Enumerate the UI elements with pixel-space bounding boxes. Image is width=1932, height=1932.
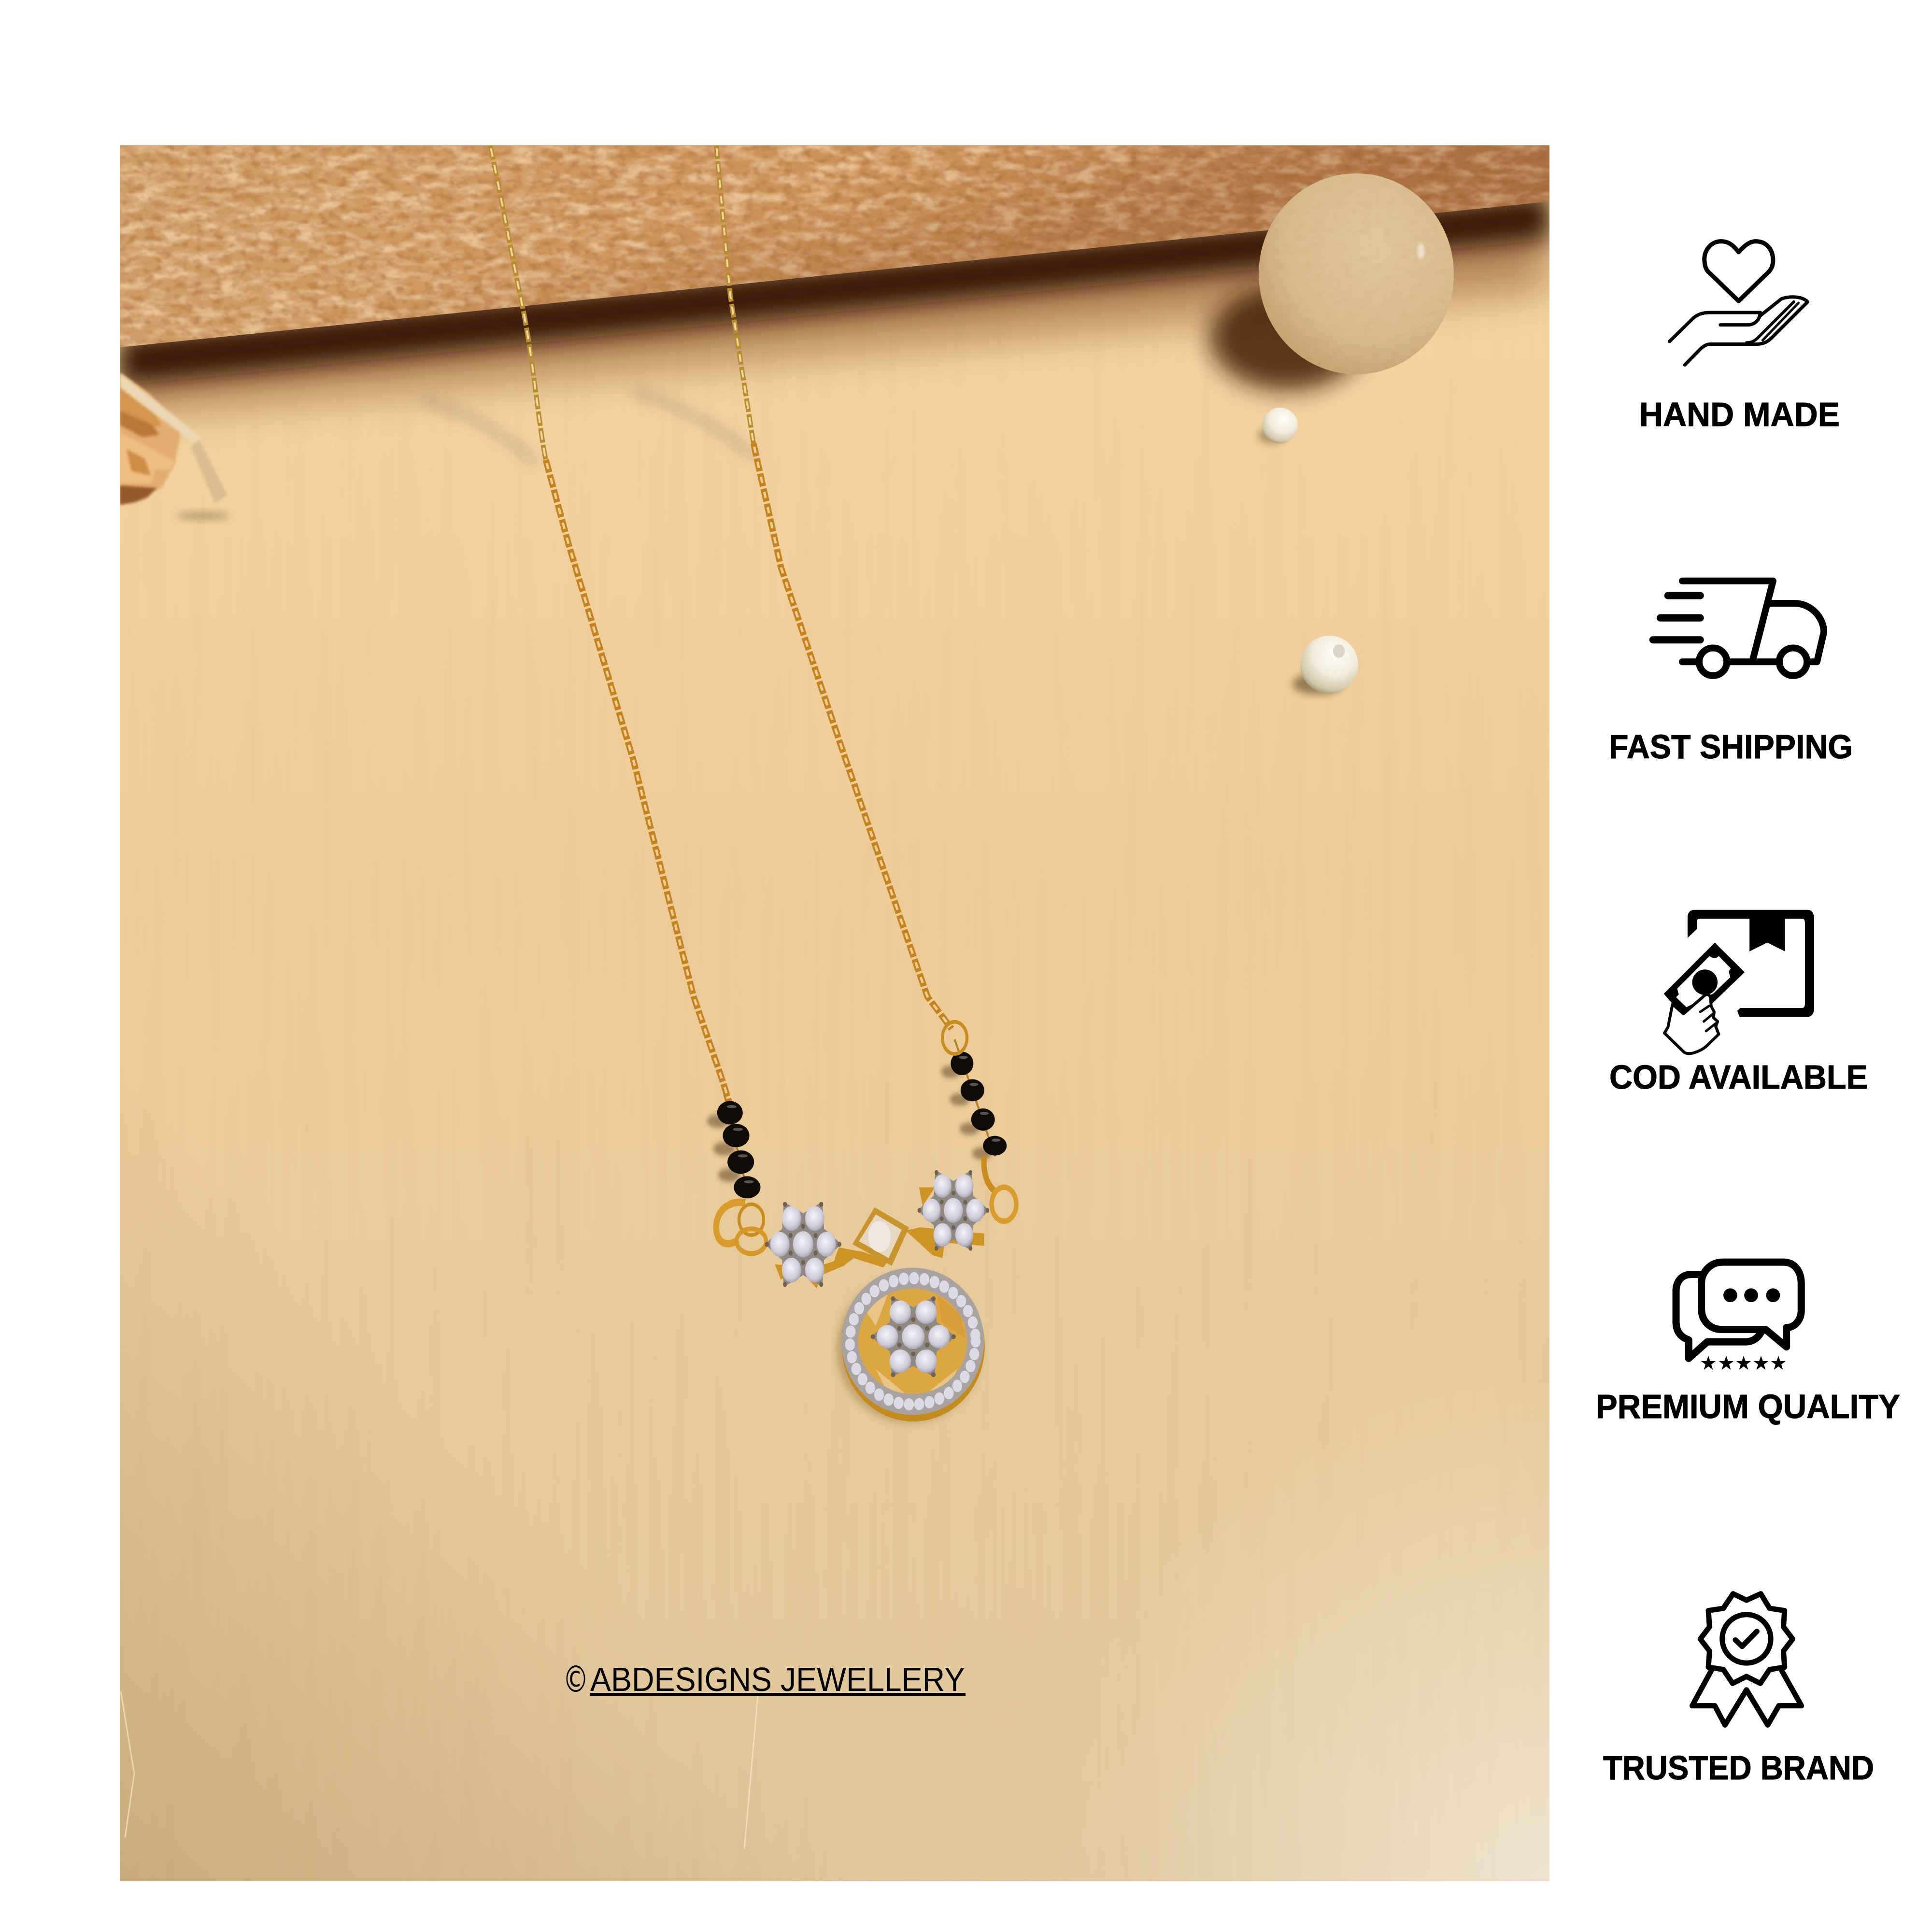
label: trusted brand: TRUSTED BRAND <box>1603 1749 1874 1787</box>
feature: COD available <box>1609 910 1868 1096</box>
icon: hand holding heart <box>1670 242 1808 365</box>
feature: fast shipping <box>1609 581 1853 766</box>
feature: trusted brand <box>1603 1594 1874 1787</box>
chain shadows <box>421 391 756 464</box>
pearl: small <box>1258 408 1298 443</box>
wooden ball <box>1210 173 1454 390</box>
copyright symbol: © <box>563 1658 589 1701</box>
watermark name: ABDESIGNS JEWELLERY <box>590 1661 965 1698</box>
flower: pendant centre <box>871 1296 956 1377</box>
feature: hand made <box>1639 242 1840 433</box>
icon: rosette badge with check <box>1692 1594 1802 1725</box>
cork roll <box>120 145 1549 347</box>
panel: product photo <box>120 145 1549 1881</box>
icon: speech bubbles with stars <box>1676 1262 1801 1358</box>
flower: right <box>918 1170 989 1251</box>
label: premium quality: PREMIUM QUALITY <box>1596 1388 1900 1425</box>
flower: left <box>765 1202 841 1287</box>
paper backdrop <box>120 145 1549 1881</box>
raffia bundle <box>120 373 229 520</box>
feature: premium quality <box>1596 1262 1900 1425</box>
label: hand made: HAND MADE <box>1639 396 1840 433</box>
rings and clasps <box>716 1022 1016 1253</box>
pearl: large <box>1293 636 1358 695</box>
shadow under cork roll <box>120 193 1549 415</box>
label: COD available: COD AVAILABLE <box>1609 1058 1868 1096</box>
black beads <box>707 1039 1007 1198</box>
watermark <box>563 1658 966 1701</box>
label: fast shipping: FAST SHIPPING <box>1609 728 1853 766</box>
necklace chain: left strand <box>490 145 730 1106</box>
necklace chain: right strand <box>716 145 952 1029</box>
gold bars <box>775 1187 984 1288</box>
centre square stone <box>852 1208 909 1266</box>
icon: five stars <box>1701 1356 1786 1370</box>
pendant assembly <box>707 1022 1016 1423</box>
round pendant <box>837 1270 985 1423</box>
icon: delivery truck <box>1653 581 1824 676</box>
icon: box and cash in hand <box>1664 910 1814 1053</box>
